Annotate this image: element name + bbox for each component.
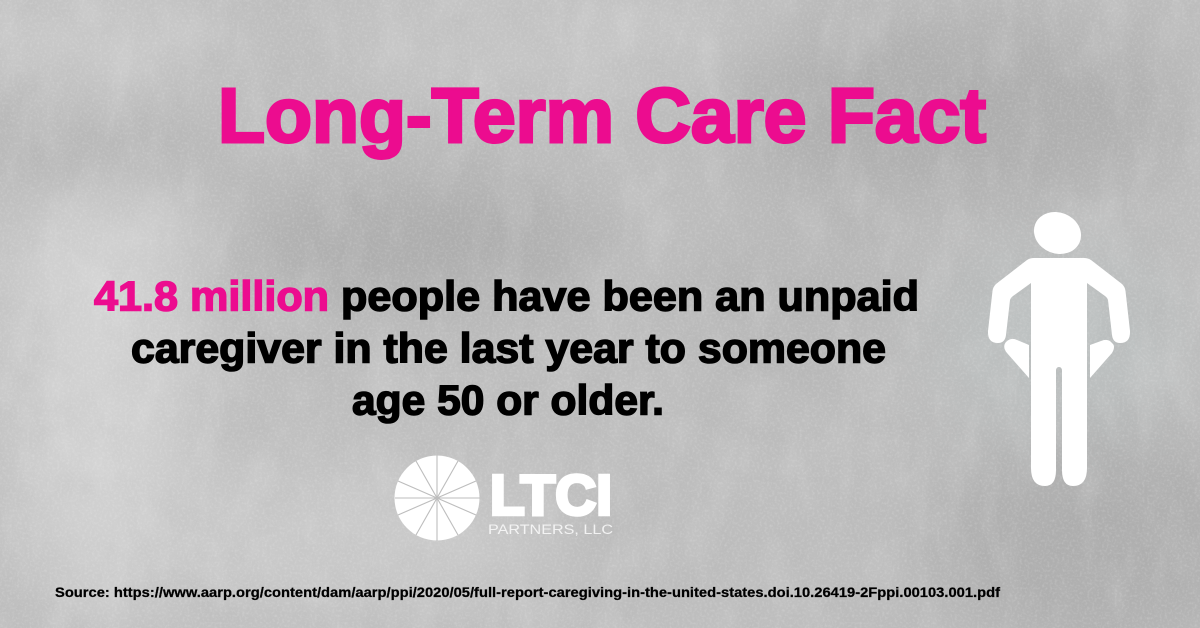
logo wordmark: LTCI bbox=[490, 464, 612, 528]
statement line 1: 41.8 million people have been an unpaid bbox=[94, 272, 919, 320]
title: Long-Term Care Fact bbox=[218, 73, 986, 159]
logo wheel bbox=[394, 455, 480, 541]
right pocket bbox=[1090, 340, 1114, 378]
main statement bbox=[94, 272, 919, 424]
statement line 3: age 50 or older. bbox=[352, 376, 664, 424]
logo subline: PARTNERS, LLC bbox=[488, 522, 613, 537]
head bbox=[1028, 205, 1087, 261]
statement line 2: caregiver in the last year to someone bbox=[131, 324, 886, 372]
body bbox=[988, 258, 1130, 486]
logo: LTCI Partners bbox=[394, 455, 613, 541]
source citation: Source: https://www.aarp.org/content/dam/aarp/ppi/2020/05/full-report-caregiving-in-the-united-states.doi.10.26419-2Fppi.00103.001.pdf bbox=[55, 585, 1001, 600]
icon: person with empty pockets bbox=[988, 205, 1130, 486]
left pocket bbox=[1004, 339, 1029, 378]
